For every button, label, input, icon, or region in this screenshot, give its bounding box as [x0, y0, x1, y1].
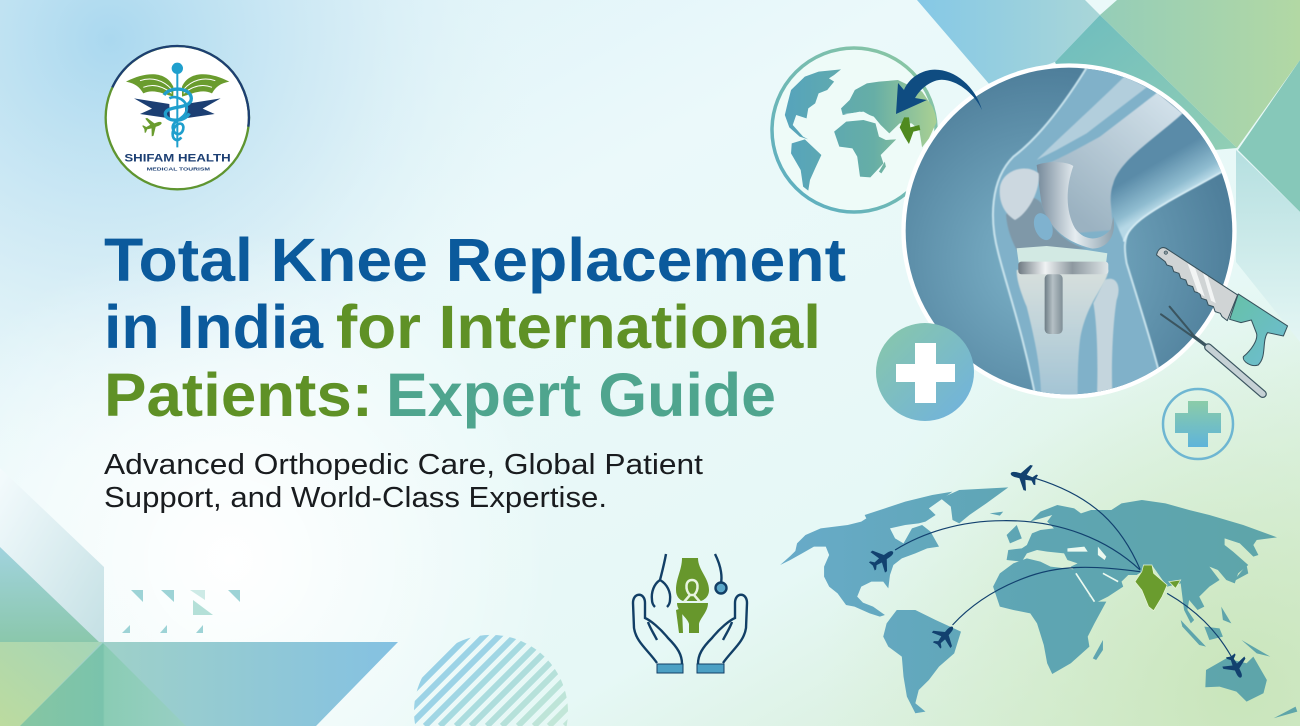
icon: small medical plus	[1163, 389, 1233, 459]
world map	[780, 461, 1297, 718]
North America	[780, 492, 953, 617]
icon: blade highlights	[1188, 263, 1216, 303]
right hand	[698, 595, 747, 664]
poly spacer	[1017, 246, 1107, 264]
icon: big medical plus	[876, 323, 974, 421]
title: for International	[336, 293, 821, 362]
striped circle	[414, 635, 568, 726]
subtitle: Support, and World-Class Expertise.	[104, 482, 607, 514]
India highlight	[1135, 565, 1181, 611]
title: in India	[104, 293, 324, 362]
thigh edge highlight	[1124, 170, 1225, 242]
icon: caduceus	[164, 63, 191, 147]
islands	[1007, 525, 1022, 543]
fibula icon	[676, 608, 683, 633]
icon: fork	[1161, 307, 1263, 394]
subtitle: Advanced Orthopedic Care, Global Patient	[104, 449, 703, 481]
icon: green wings	[126, 74, 229, 97]
red sea line	[1076, 573, 1118, 602]
icon: hands holding knee with stethoscope	[633, 554, 747, 673]
tibia	[1017, 270, 1108, 403]
bottom-left geometric shapes	[0, 468, 398, 726]
icon: plane	[140, 114, 165, 138]
icon: saw hole	[1164, 251, 1168, 254]
femur	[1040, 93, 1183, 233]
globe	[772, 48, 938, 212]
icon: surgical tools	[1157, 248, 1288, 394]
icon: India on globe	[900, 117, 920, 144]
inland seas	[1067, 547, 1106, 560]
stethoscope	[652, 554, 726, 607]
subtitle	[104, 449, 703, 514]
lower femoral shadow	[1006, 197, 1087, 250]
icon: saw blade	[1157, 248, 1238, 321]
logo name: SHIFAM HEALTH	[124, 153, 231, 165]
tibial stem	[1045, 274, 1063, 334]
icon: navy wings	[134, 98, 221, 118]
arrow: curved to India	[896, 70, 982, 114]
lens disc	[1034, 213, 1053, 240]
Greenland	[941, 487, 1008, 523]
Eurasia	[1007, 500, 1277, 623]
joint ribbon	[684, 580, 700, 602]
cuffs	[657, 664, 683, 673]
title: Total Knee Replacement	[104, 226, 846, 295]
tendon band	[1037, 76, 1147, 160]
knee illustration	[901, 63, 1237, 403]
Australia	[1205, 657, 1267, 702]
soft tissue	[993, 67, 1167, 403]
planes	[865, 461, 1252, 683]
femur icon	[676, 558, 709, 601]
icon: wing feather lines	[140, 79, 215, 93]
South America	[883, 610, 961, 713]
top-right geometric shapes	[917, 0, 1300, 342]
small triangle accents	[122, 590, 240, 633]
title: Patients:	[104, 361, 373, 430]
flight arcs	[895, 478, 1231, 657]
fibula	[1093, 279, 1119, 403]
icon: saw handle	[1230, 294, 1288, 366]
logo: Shifam Health	[106, 46, 249, 189]
thigh shading	[1110, 114, 1221, 240]
tibia icon	[677, 603, 708, 633]
tibial tray	[1018, 262, 1108, 274]
title	[104, 226, 846, 430]
femoral implant	[1037, 162, 1114, 249]
Africa	[993, 558, 1106, 674]
title: Expert Guide	[386, 361, 776, 430]
inland sea	[844, 112, 876, 118]
logo tagline: MEDICAL TOURISM	[147, 166, 210, 172]
left hand	[633, 595, 682, 664]
patella	[1000, 168, 1039, 220]
